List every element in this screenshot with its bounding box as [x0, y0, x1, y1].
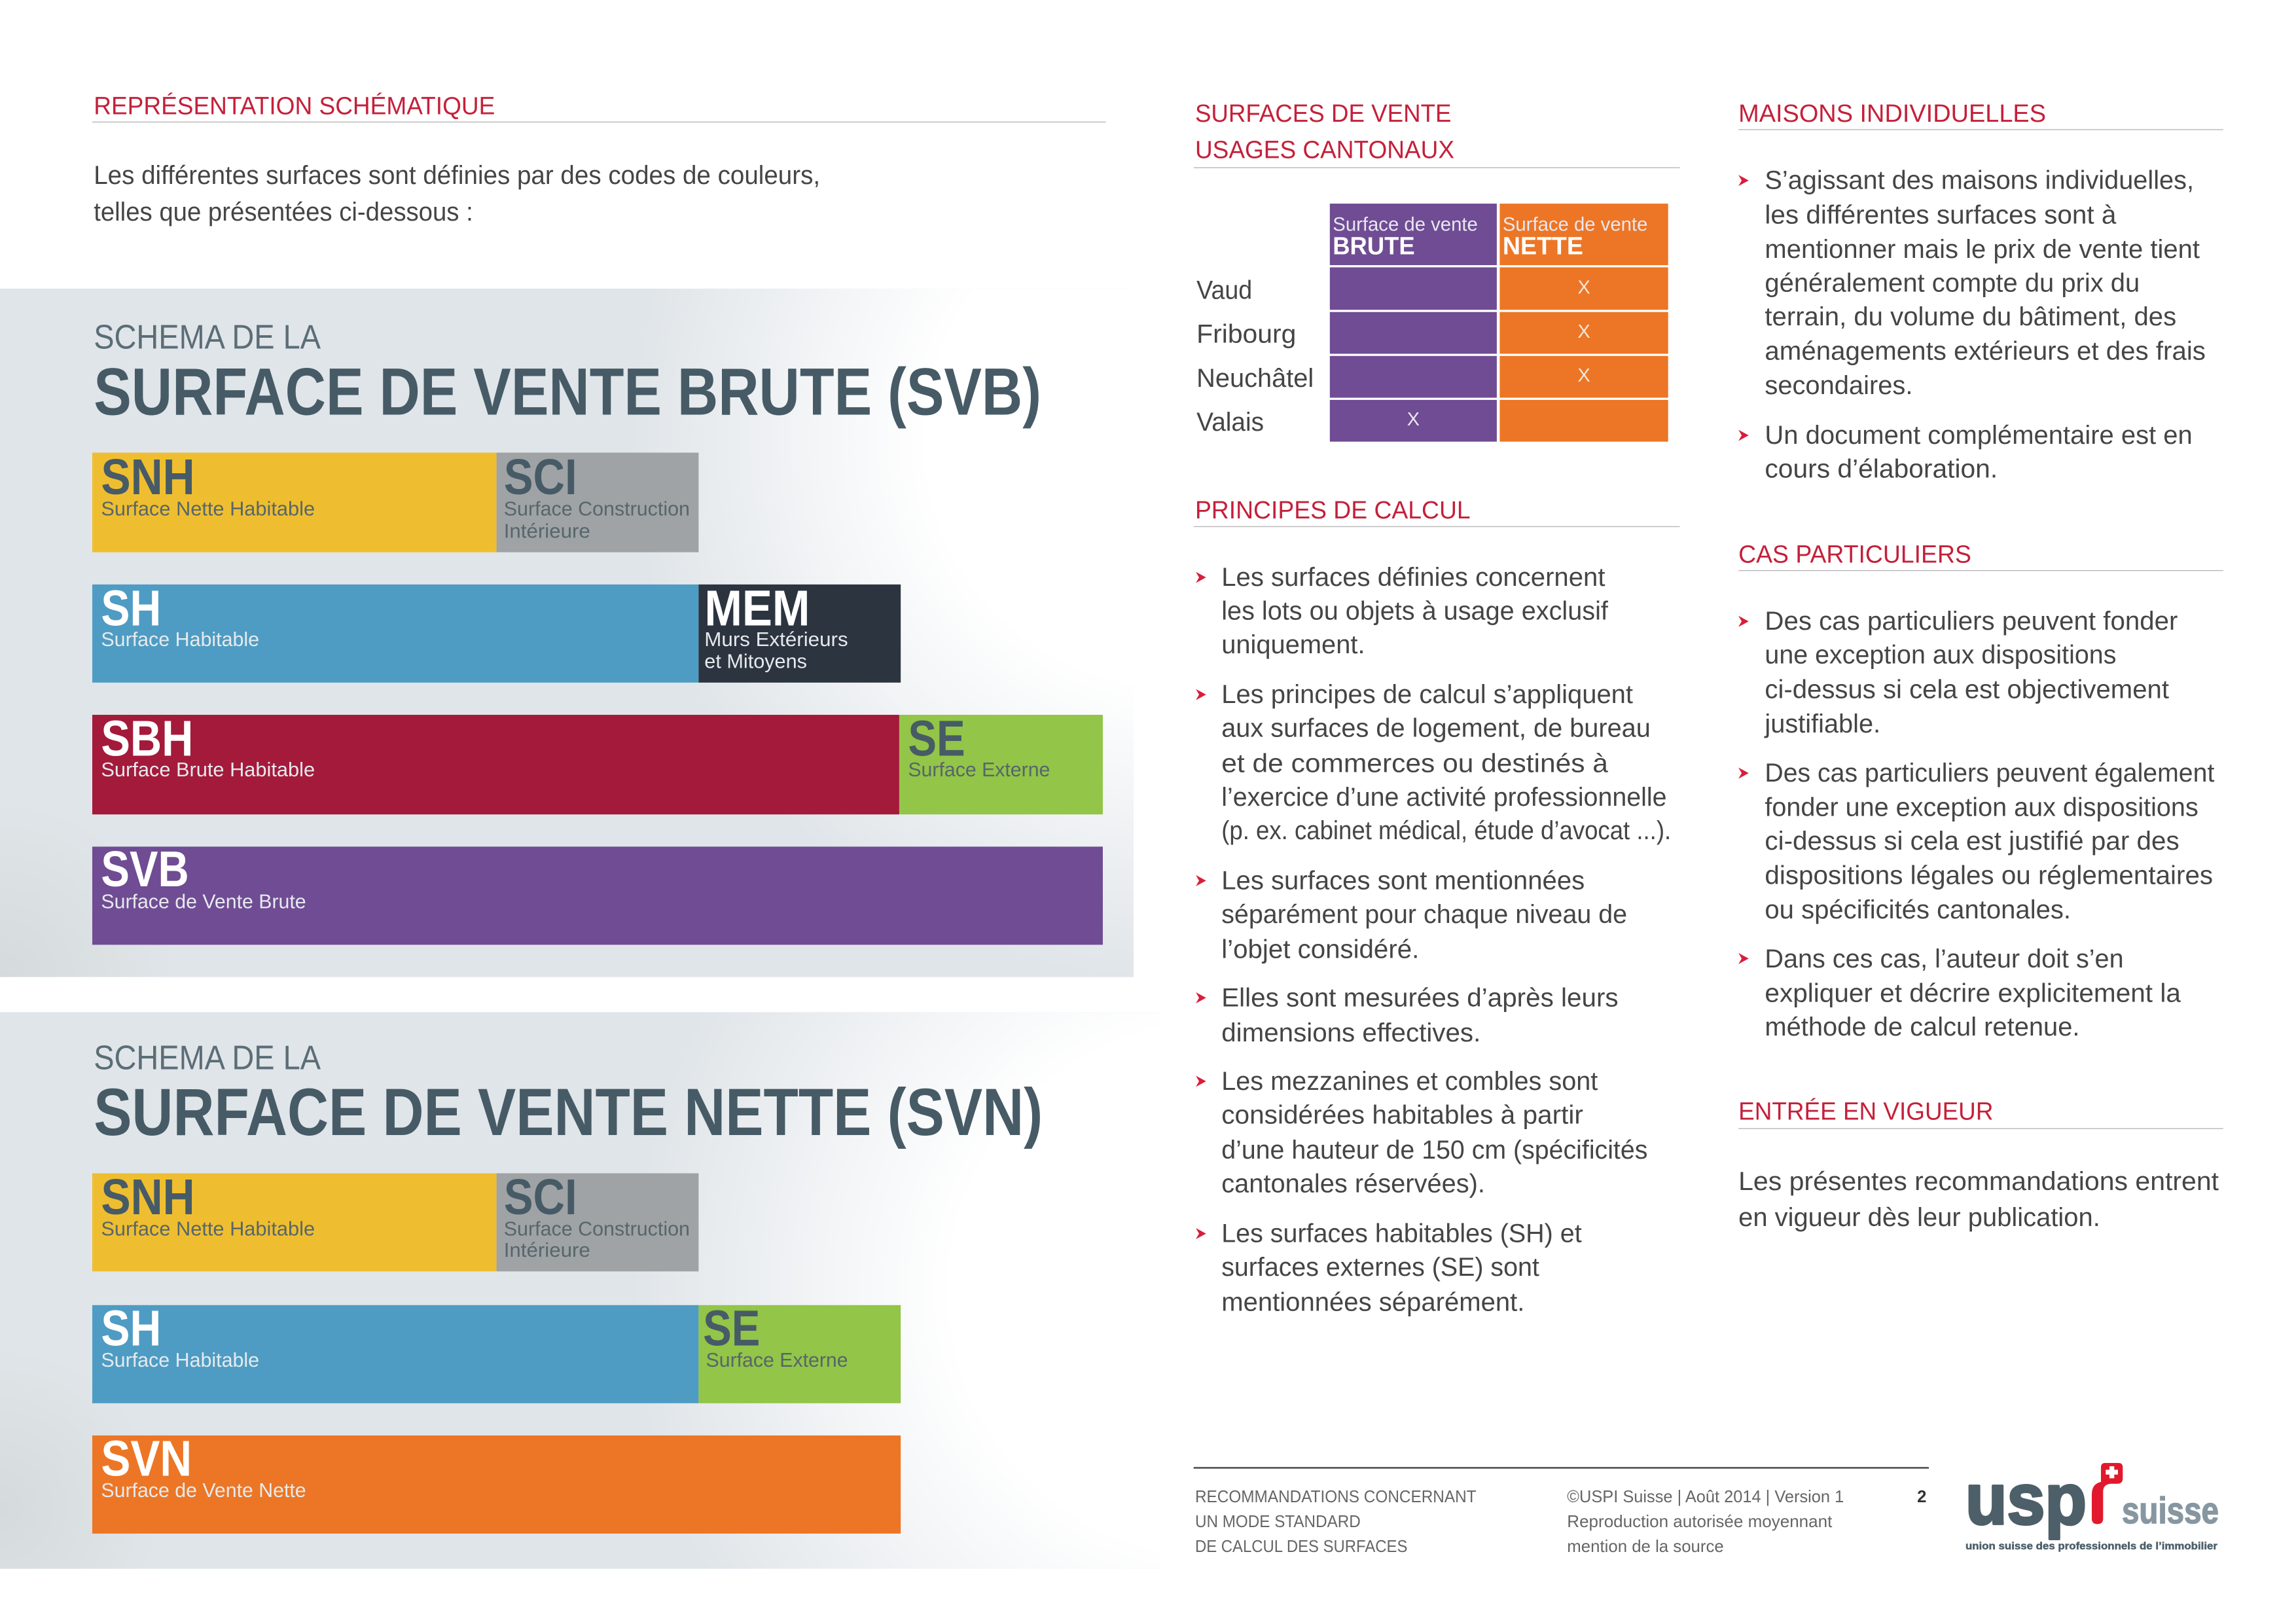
bullet: surfaces habitables et externes: surfaces externes (SE) sont	[1221, 1253, 1539, 1282]
table: cantonal usages: X	[1577, 321, 1590, 342]
bullet: dimensions effectives	[1196, 983, 1619, 1047]
panel: schematic representation intro	[92, 92, 1105, 226]
bar row: SNH + SCI: Intérieure	[504, 520, 590, 542]
bullet: méthode retenue: méthode de calcul retenue.	[1765, 1013, 2079, 1041]
bullet: surfaces habitables et externes: Les surfaces habitables (SH) et	[1221, 1219, 1582, 1248]
bullet: prix de vente: généralement compte du prix du	[1765, 268, 2140, 297]
heading: schema de la SVB: SURFACE DE VENTE BRUTE (SVB)	[94, 354, 1041, 429]
logo: uspi suisse: usp	[1965, 1459, 2087, 1540]
panel: schema SVB	[0, 289, 1134, 977]
bar row: SH + SE: Surface Externe	[706, 1350, 848, 1371]
text: entrée en vigueur: en vigueur dès leur publication.	[1738, 1203, 2100, 1232]
bullet: exception objectivement justifiable	[1738, 607, 2178, 738]
bullet: dispositions légales	[1738, 759, 2214, 924]
bullet: surfaces définies: Les surfaces définies concernent	[1221, 563, 1605, 592]
bar row: SH + MEM: SH	[101, 581, 161, 637]
bar row: SBH + SE: SBH	[101, 711, 193, 767]
panel: principes de calcul	[1194, 497, 1680, 1317]
logo: uspi suisse: suisse	[2122, 1490, 2219, 1532]
bullet: prix de vente: mentionner mais le prix de vente tient	[1765, 235, 2200, 264]
bar row: SH + MEM	[92, 581, 901, 683]
bullet: dispositions légales: dispositions légales ou réglementaires	[1765, 861, 2213, 890]
table: cantonal usages: Surface de vente	[1503, 213, 1647, 235]
table: cantonal usages: Surface de vente	[1333, 213, 1478, 235]
table: cantonal usages: Fribourg	[1196, 320, 1296, 349]
logo: uspi suisse	[1965, 1459, 2219, 1552]
intro text: telles que présentées ci-dessous :	[94, 198, 473, 226]
text: entrée en vigueur: Les présentes recommandations entrent	[1738, 1167, 2219, 1196]
intro text: Les différentes surfaces sont définies par des codes de couleurs,	[94, 161, 820, 190]
bar row: SBH + SE: Surface Externe	[908, 759, 1050, 781]
bullet: mezzanines et combles: Les mezzanines et combles sont	[1221, 1067, 1598, 1096]
bullet: chaque niveau: Les surfaces sont mentionnées	[1221, 866, 1585, 895]
bar row: SH + SE: SH	[101, 1300, 161, 1356]
heading: schema de la SVN: SCHEMA DE LA	[94, 1039, 321, 1077]
bullet: exception objectivement justifiable: justifiable.	[1764, 710, 1880, 738]
table: cantonal usages: Valais	[1196, 408, 1264, 437]
heading: surfaces de vente usages cantonaux: SURFACES DE VENTE	[1195, 100, 1452, 128]
bullet: chaque niveau: séparément pour chaque niveau de	[1221, 900, 1627, 929]
text: entrée en vigueur	[1738, 1167, 2219, 1232]
bullet: dispositions légales: ou spécificités cantonales.	[1765, 895, 2071, 924]
heading: principes de calcul: PRINCIPES DE CALCUL	[1195, 497, 1471, 524]
bar row: SNH + SCI: SCI	[504, 1169, 577, 1225]
bullet: prix de vente	[1738, 166, 2206, 400]
panel: cas particuliers	[1738, 541, 2223, 1041]
bar row: SH + MEM: Murs Extérieurs	[704, 629, 848, 651]
bullet: surfaces définies: uniquement.	[1221, 630, 1365, 659]
bullet: surfaces définies: les lots ou objets à usage exclusif	[1221, 597, 1609, 626]
bar row: SNH + SCI: Surface Construction	[504, 1219, 690, 1240]
bullet: principes de calcul	[1196, 680, 1671, 845]
bullet: dimensions effectives: dimensions effectives.	[1221, 1019, 1480, 1047]
bullet: principes de calcul: (p. ex. cabinet médical, étude d’avocat ...).	[1221, 816, 1671, 845]
panel: entrée en vigueur	[1738, 1098, 2223, 1232]
table: cantonal usages: BRUTE	[1333, 232, 1415, 260]
bar row: SVN: SVN	[101, 1431, 192, 1487]
logo: uspi suisse: union suisse des professionnels de l’immobilier	[1965, 1541, 2217, 1552]
panel: surfaces de vente usages cantonaux	[1194, 100, 1680, 442]
heading: entrée en vigueur: ENTRÉE EN VIGUEUR	[1738, 1098, 1993, 1126]
bar row: SH + SE: Surface Habitable	[101, 1350, 259, 1371]
bullet: exception objectivement justifiable: une exception aux dispositions	[1765, 641, 2116, 670]
table: cantonal usages: X	[1577, 278, 1590, 298]
bullet: dimensions effectives: Elles sont mesurées d’après leurs	[1221, 983, 1619, 1012]
bullet: mezzanines et combles: considérées habitables à partir	[1221, 1100, 1583, 1129]
bullet: chaque niveau: l’objet considéré.	[1221, 935, 1419, 964]
bar row: SH + MEM: Surface Habitable	[101, 629, 259, 651]
bullet: surfaces habitables et externes: mentionnées séparément.	[1221, 1288, 1524, 1317]
footer text: document title: UN MODE STANDARD	[1195, 1513, 1361, 1531]
heading: schema de la SVB	[94, 319, 1041, 429]
bar row: SNH + SCI: SNH	[101, 1169, 195, 1225]
heading: représentation schématique: REPRÉSENTATION SCHÉMATIQUE	[94, 92, 495, 120]
bullet: prix de vente: les différentes surfaces sont à	[1765, 200, 2117, 229]
bullet: mezzanines et combles	[1196, 1067, 1647, 1199]
bar row: SNH + SCI: SNH	[101, 449, 195, 505]
heading: surfaces de vente usages cantonaux: USAGES CANTONAUX	[1195, 137, 1454, 164]
bullet: principes de calcul: aux surfaces de logement, de bureau	[1221, 714, 1651, 743]
bar row: SNH + SCI: Surface Nette Habitable	[101, 1219, 315, 1240]
footer text: document title: RECOMMANDATIONS CONCERNANT	[1195, 1488, 1477, 1506]
bullet: document complémentaire	[1738, 421, 2193, 484]
bar row: SNH + SCI	[92, 1169, 698, 1271]
bullet: dispositions légales: ci-dessus si cela est justifié par des	[1765, 827, 2179, 856]
bullet: mezzanines et combles: cantonales réservées).	[1221, 1170, 1485, 1199]
table: cantonal usages: Vaud	[1196, 276, 1252, 305]
heading: maisons individuelles: MAISONS INDIVIDUELLES	[1738, 100, 2046, 128]
heading: cas particuliers: CAS PARTICULIERS	[1738, 541, 1971, 568]
footer text: copyright: ©USPI Suisse | Août 2014 | Version 1	[1567, 1488, 1844, 1506]
bullet: prix de vente: S’agissant des maisons individuelles,	[1765, 166, 2194, 195]
bullet: document complémentaire: Un document complémentaire est en	[1765, 421, 2193, 450]
panel: schema SVN	[0, 1012, 1160, 1569]
bar row: SVN	[92, 1431, 901, 1534]
bar row: SNH + SCI	[92, 449, 698, 552]
bullet: prix de vente: secondaires.	[1765, 371, 1912, 400]
bar row: SNH + SCI: Surface Nette Habitable	[101, 499, 315, 520]
bullet: principes de calcul: Les principes de calcul s’appliquent	[1221, 680, 1633, 709]
bar row: SH + MEM: MEM	[704, 581, 810, 637]
bar row: SVB: SVB	[101, 841, 189, 897]
bullet: document complémentaire: cours d’élaboration.	[1765, 455, 1998, 484]
bar row: SVB: Surface de Vente Brute	[101, 891, 306, 912]
bullet: exception objectivement justifiable: ci-dessus si cela est objectivement	[1765, 675, 2169, 704]
bullet: méthode retenue: Dans ces cas, l’auteur doit s’en	[1765, 945, 2124, 973]
bullet: principes de calcul: et de commerces ou destinés à	[1221, 749, 1609, 778]
footer text: document title	[1195, 1488, 1477, 1556]
bullet: surfaces définies	[1196, 563, 1609, 659]
bullet: exception objectivement justifiable: Des cas particuliers peuvent fonder	[1765, 607, 2178, 636]
table: cantonal usages: X	[1407, 409, 1420, 430]
bullet: méthode retenue	[1738, 945, 2181, 1041]
table: cantonal usages	[1196, 204, 1668, 442]
panel: maisons individuelles	[1738, 100, 2223, 484]
bar row: SNH + SCI: SCI	[504, 449, 577, 505]
table: cantonal usages: NETTE	[1503, 232, 1583, 260]
bar row: SBH + SE	[92, 711, 1103, 814]
bullet: surfaces habitables et externes	[1196, 1219, 1582, 1317]
page number: 2	[1917, 1488, 1926, 1506]
bullet: mezzanines et combles: d’une hauteur de 150 cm (spécificités	[1221, 1136, 1647, 1164]
heading: schema de la SVN	[94, 1039, 1043, 1149]
bar row: SBH + SE: SE	[908, 711, 965, 767]
heading: schema de la SVB: SCHEMA DE LA	[94, 319, 321, 357]
bullet: dispositions légales: Des cas particuliers peuvent également	[1765, 759, 2214, 787]
footer text: document title: DE CALCUL DES SURFACES	[1195, 1538, 1407, 1556]
bar row: SNH + SCI: Intérieure	[504, 1240, 590, 1261]
heading: surfaces de vente usages cantonaux	[1194, 100, 1680, 168]
bullet: méthode retenue: expliquer et décrire explicitement la	[1765, 979, 2181, 1008]
footer text: copyright: Reproduction autorisée moyennant	[1567, 1513, 1832, 1531]
bullet: chaque niveau	[1196, 866, 1627, 964]
bar row: SNH + SCI: Surface Construction	[504, 499, 690, 520]
footer text: copyright: mention de la source	[1567, 1538, 1724, 1556]
bar row: SBH + SE: Surface Brute Habitable	[101, 759, 315, 781]
bullet: principes de calcul: l’exercice d’une activité professionnelle	[1221, 783, 1666, 812]
bullet: prix de vente: aménagements extérieurs et des frais	[1765, 336, 2206, 365]
footer	[1194, 1459, 2219, 1556]
table: cantonal usages: X	[1577, 365, 1590, 386]
footer text: copyright	[1567, 1488, 1844, 1556]
icon: red i with swiss cross	[2092, 1463, 2123, 1524]
bar row: SH + SE: SE	[703, 1300, 760, 1356]
bar row: SVB	[92, 841, 1103, 945]
bar row: SH + SE	[92, 1300, 901, 1403]
bar row: SH + MEM: et Mitoyens	[704, 651, 807, 672]
intro text	[94, 161, 820, 226]
bullet: prix de vente: terrain, du volume du bâtiment, des	[1765, 302, 2176, 331]
heading: schema de la SVN: SURFACE DE VENTE NETTE (SVN)	[94, 1075, 1043, 1149]
bullet: dispositions légales: fonder une exception aux dispositions	[1765, 793, 2198, 821]
bar row: SVN: Surface de Vente Nette	[101, 1480, 306, 1502]
table: cantonal usages: Neuchâtel	[1196, 364, 1314, 393]
